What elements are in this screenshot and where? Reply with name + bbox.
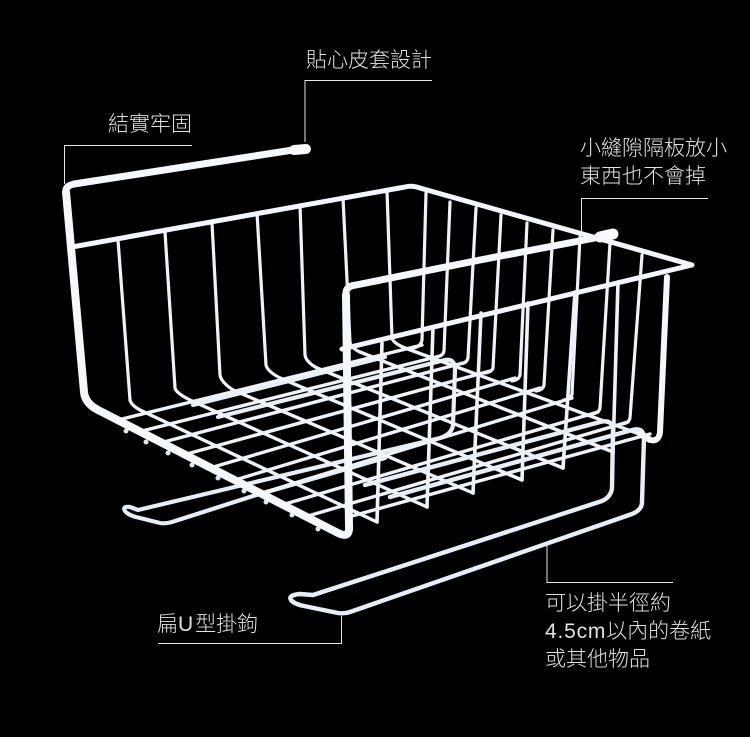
left end cap — [294, 149, 306, 150]
back-left wall wires — [118, 191, 405, 410]
right post — [640, 277, 667, 440]
back-right wall wires — [414, 193, 642, 424]
callout lines — [64, 80, 708, 644]
label: gap storage: 東西也不會掉 — [580, 165, 706, 188]
rail nubs — [124, 428, 320, 532]
front-right wall wires — [377, 282, 618, 522]
label: flat U hook: 扁U型掛鉤 — [157, 613, 258, 636]
label: paper roll: 4.5cm以內的卷紙 — [545, 620, 711, 643]
label: paper roll: 可以掛半徑約 — [545, 592, 671, 615]
label: paper roll — [545, 592, 711, 671]
floor grid — [118, 345, 650, 522]
right paper hanger — [290, 421, 644, 613]
left post and front-left rail — [66, 192, 349, 535]
back rim — [72, 186, 692, 349]
right end cap — [600, 234, 613, 237]
label: sturdy: 結實牢固 — [108, 113, 192, 136]
top bar right — [346, 237, 600, 295]
label: gap storage: 小縫隙隔板放小 — [580, 137, 727, 160]
label: gap storage — [580, 137, 727, 188]
left paper hanger — [124, 357, 455, 523]
top bar left — [66, 150, 293, 192]
label: paper roll: 或其他物品 — [545, 648, 650, 671]
label: sleeve: 貼心皮套設計 — [306, 49, 432, 72]
